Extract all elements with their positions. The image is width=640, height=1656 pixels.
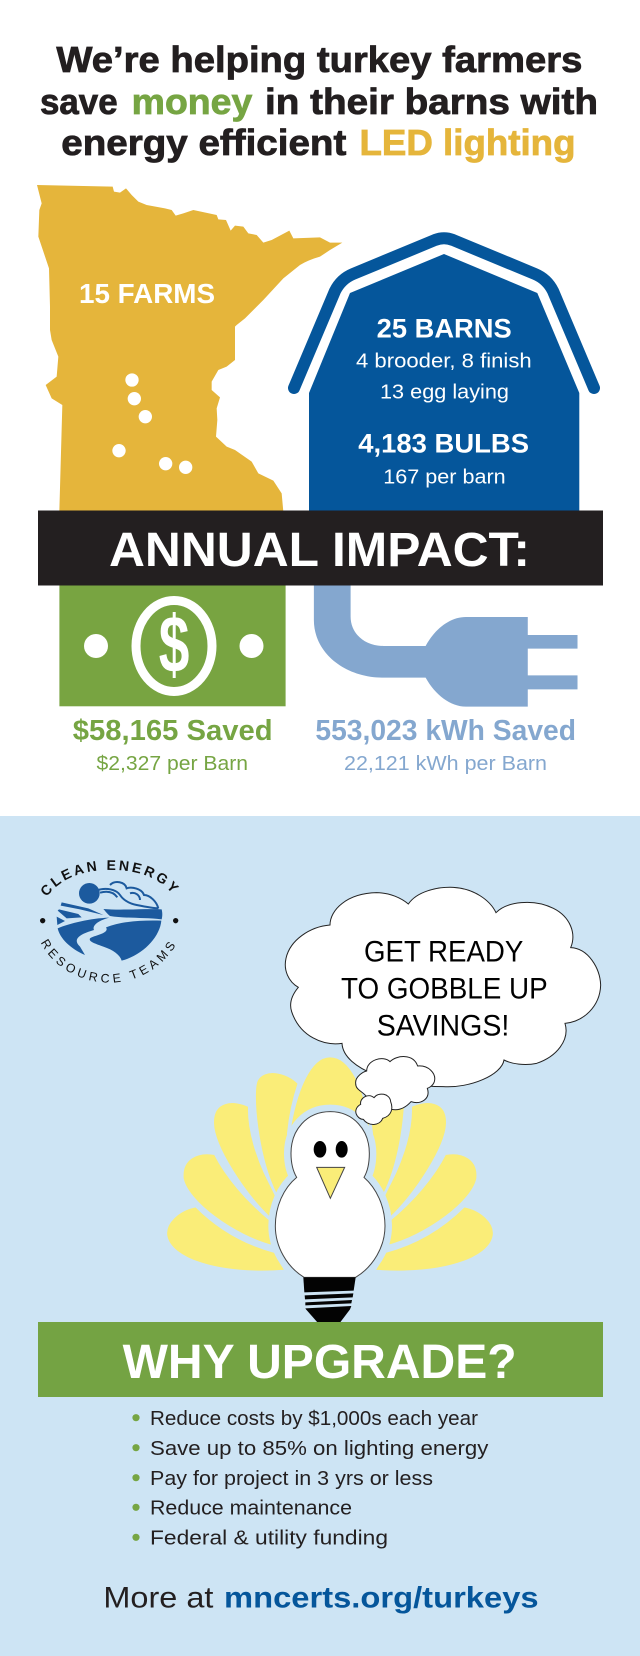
title: money (132, 81, 252, 122)
thought bubble (285, 887, 601, 1124)
benefits list: Reduce costs by $1,000s each year (150, 1408, 478, 1430)
benefits list (132, 1408, 488, 1550)
benefits list: Federal & utility funding (150, 1528, 388, 1550)
bulb screw base (303, 1277, 356, 1323)
thought bubble: TO GOBBLE UP (341, 972, 548, 1005)
turkey tail feathers (166, 1056, 494, 1272)
logo: Clean Energy Resource Teams (40, 860, 180, 983)
barn icon with stats: 167 per barn (383, 465, 506, 488)
money saved stat (73, 715, 273, 775)
thought bubble: SAVINGS! (377, 1010, 509, 1043)
footer link line (103, 1582, 539, 1615)
footer link line: More at (103, 1582, 214, 1615)
turkey beak (317, 1167, 345, 1198)
barn icon with stats: 25 BARNS (377, 314, 512, 344)
Minnesota map with 15 farms (37, 185, 342, 512)
money saved stat: $2,327 per Barn (96, 753, 248, 775)
title: LED lighting (360, 122, 576, 163)
turkey body (275, 1112, 385, 1277)
energy saved stat: 22,121 kWh per Barn (344, 753, 547, 775)
turkey eyes (314, 1141, 348, 1158)
title (40, 39, 598, 163)
title: We’re helping turkey farmers (56, 39, 582, 80)
title: energy efficient (61, 122, 346, 163)
money saved stat: $58,165 Saved (73, 715, 273, 747)
barn icon with stats (294, 238, 594, 511)
illustration: turkey light bulb (166, 1056, 494, 1323)
barn icon with stats: 4,183 BULBS (358, 429, 529, 459)
benefits list: Save up to 85% on lighting energy (150, 1438, 488, 1460)
annual impact banner: ANNUAL IMPACT: (109, 523, 530, 577)
logo: Clean Energy Resource Teams: CLEAN ENERGY (41, 860, 180, 895)
icon: dollar bill (59, 585, 286, 706)
why upgrade banner (38, 1322, 603, 1397)
title: save (40, 81, 118, 122)
barn icon with stats: 13 egg laying (380, 380, 509, 403)
title: in their barns with (265, 81, 598, 122)
footer link line: mncerts.org/turkeys (224, 1582, 539, 1615)
annual impact banner (38, 510, 603, 586)
Minnesota map with 15 farms: 15 FARMS (79, 278, 215, 309)
energy saved stat: 553,023 kWh Saved (315, 715, 576, 747)
benefits list: Pay for project in 3 yrs or less (150, 1468, 433, 1490)
thought bubble: GET READY (364, 936, 523, 969)
icon: dollar bill: $ (159, 598, 189, 690)
bulb body (275, 1112, 385, 1277)
benefits list: Reduce maintenance (150, 1498, 352, 1520)
logo: Clean Energy Resource Teams: RESOURCE TEAMS (41, 938, 175, 983)
barn icon with stats: 4 brooder, 8 finish (356, 350, 532, 373)
energy saved stat (315, 715, 576, 775)
icon: electric plug (314, 583, 578, 707)
why upgrade banner: WHY UPGRADE? (123, 1335, 517, 1389)
